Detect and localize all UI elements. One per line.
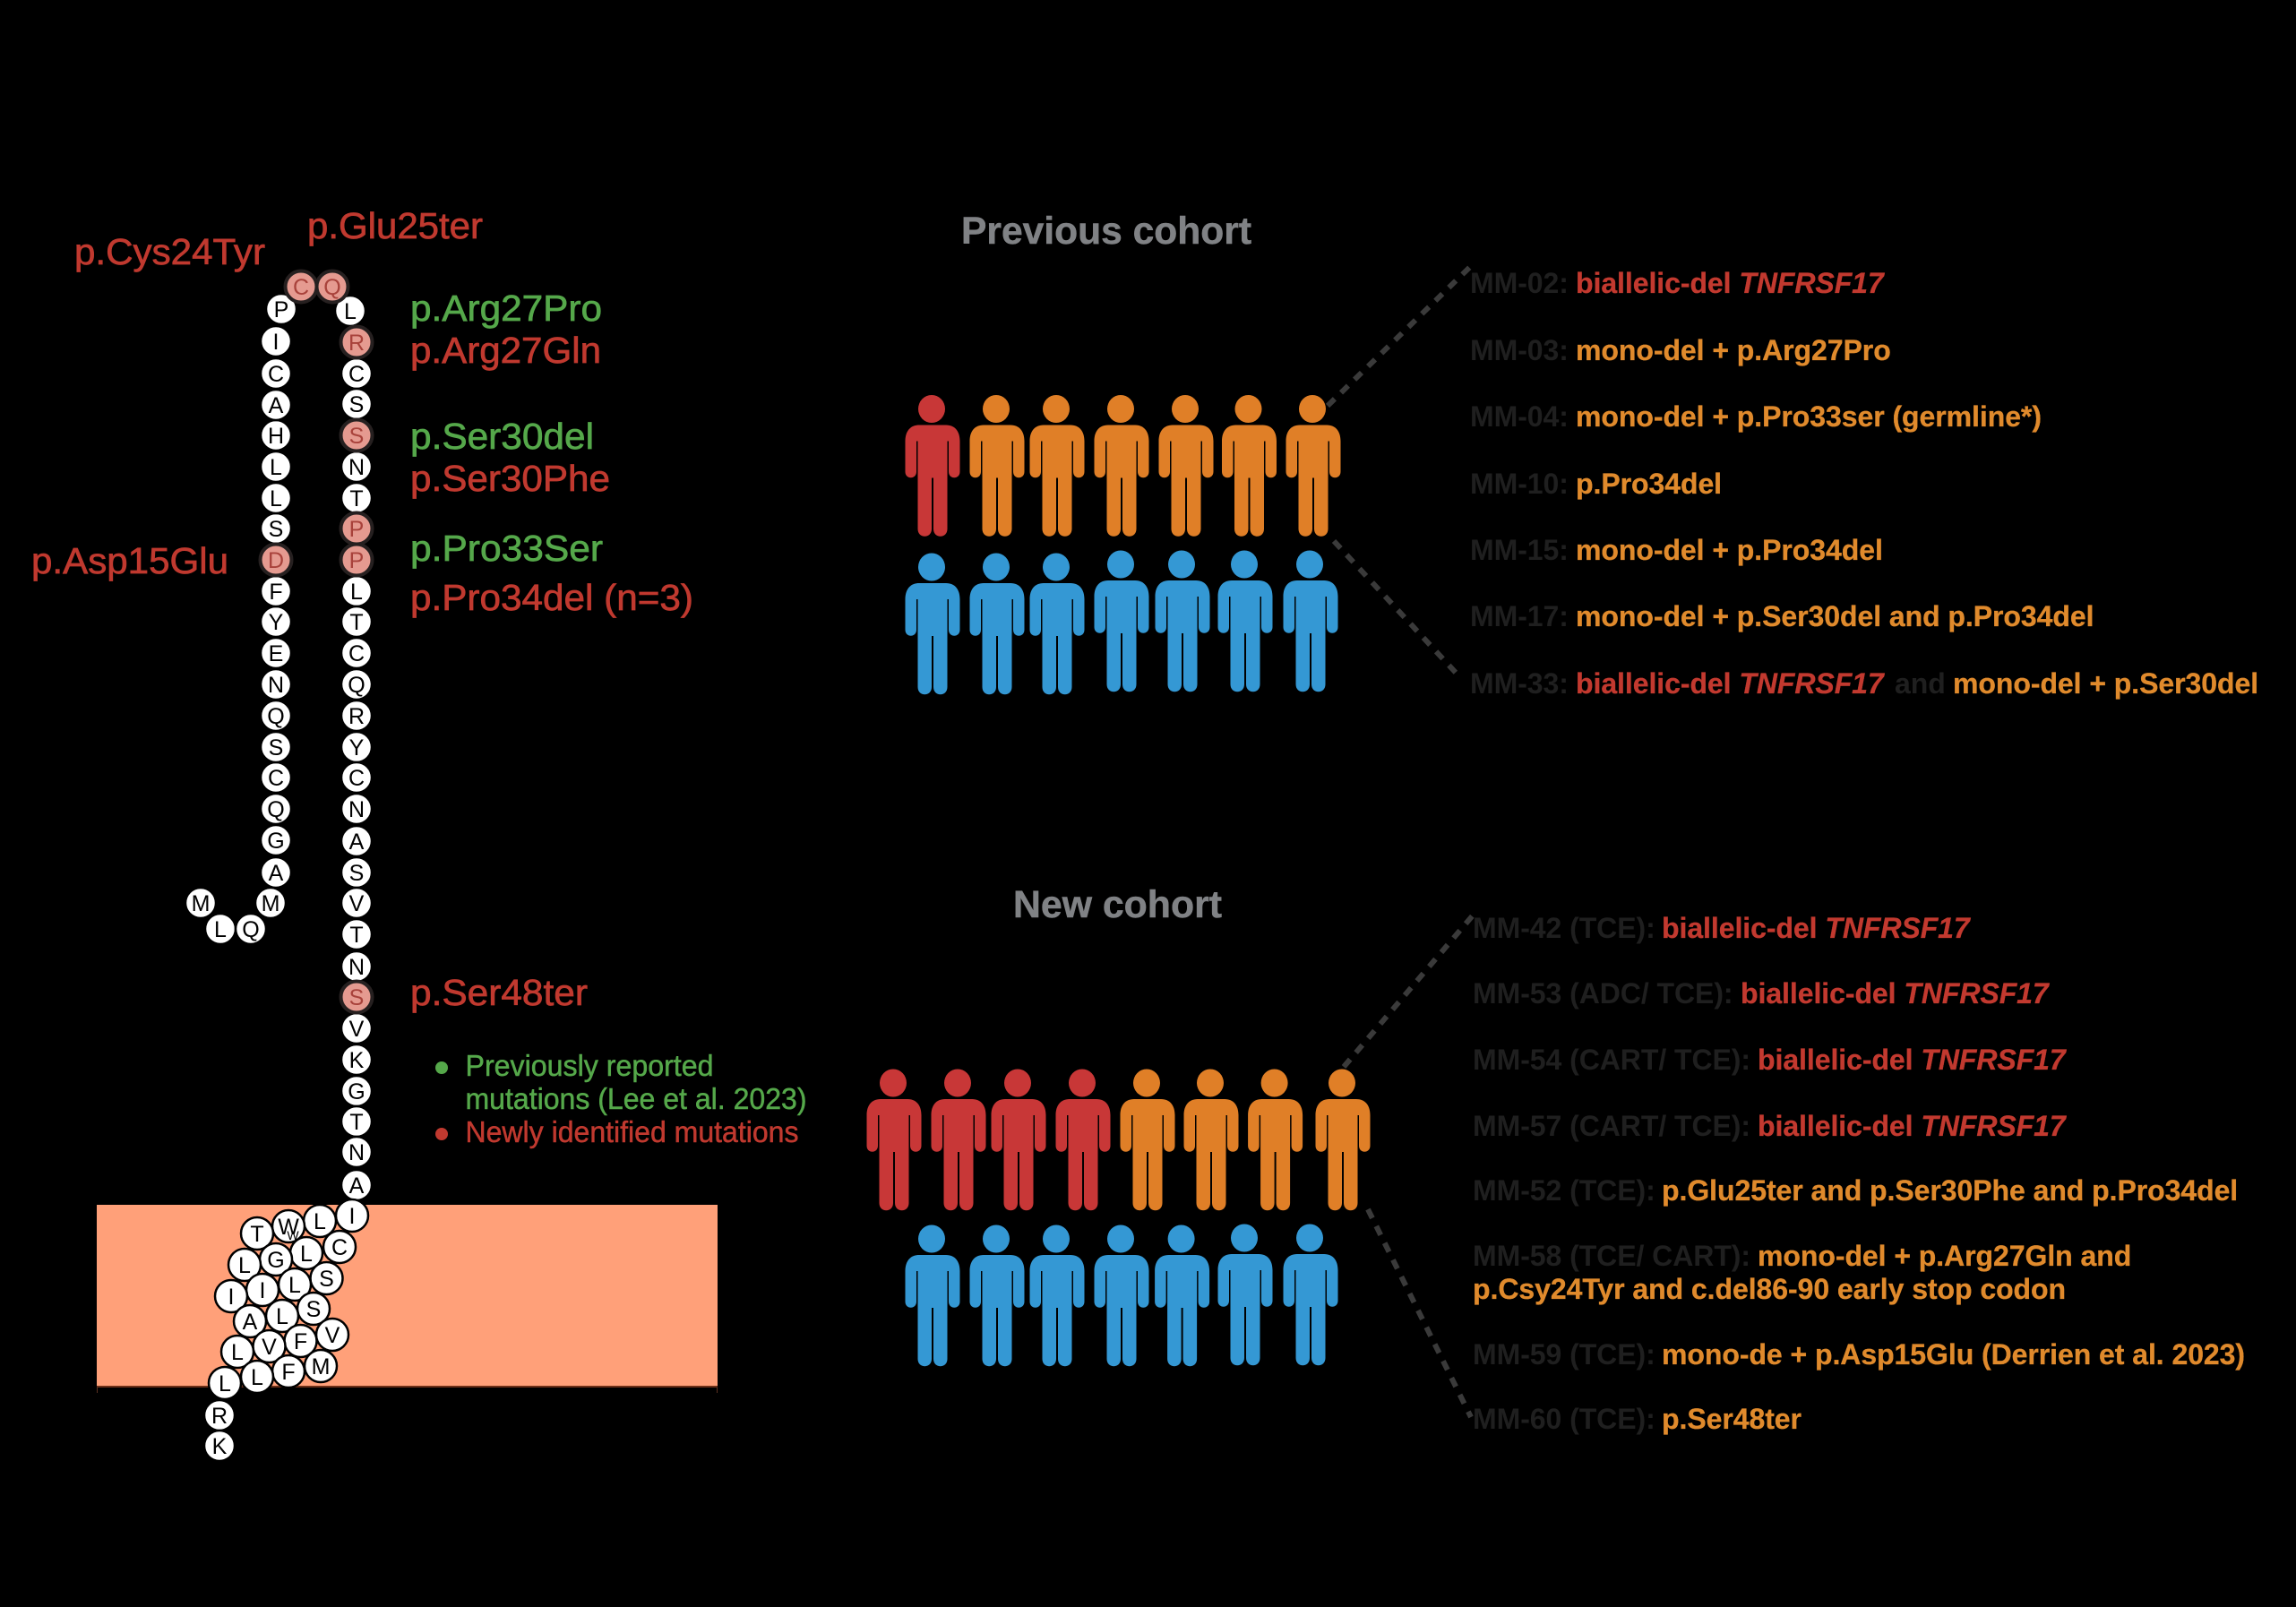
MM-03: mono-del + p.Arg27Pro: [1576, 334, 1891, 366]
protein chain: right strand: A: [349, 1173, 365, 1199]
protein chain: right strand: L: [344, 299, 357, 324]
transmembrane helix residues: F: [294, 1329, 307, 1354]
transmembrane helix residues: L: [251, 1365, 263, 1390]
MM-52: MM-52 (TCE):: [1473, 1174, 1655, 1207]
MM-58: mono-del + p.Arg27Gln and: [1758, 1240, 2131, 1272]
protein chain: N-terminal left strand: H: [268, 424, 284, 449]
protein chain: N-terminal left strand: S: [269, 517, 283, 542]
transmembrane helix residues: L: [288, 1273, 301, 1298]
label p.Arg27Pro: p.Arg27Pro: [410, 288, 602, 329]
transmembrane helix residues: S: [319, 1267, 334, 1292]
protein chain: N-terminal left strand: L: [270, 455, 282, 480]
MM-10: MM-10:: [1470, 468, 1569, 500]
dashed callout: new cohort: [1344, 915, 1473, 1417]
protein chain: N-terminal left strand: S: [269, 735, 283, 761]
transmembrane helix residues: L: [276, 1304, 288, 1329]
transmembrane helix residues: I: [349, 1204, 355, 1229]
MM-59: mono-de + p.Asp15Glu (Derrien et al. 2023): [1662, 1338, 2245, 1371]
mutated residues highlighted: P: [349, 517, 364, 542]
transmembrane helix residues: V: [262, 1335, 277, 1360]
MM-33: and: [1895, 667, 1946, 700]
protein chain: right strand: N: [348, 955, 365, 980]
protein chain: right strand: T: [349, 486, 364, 511]
label p.Glu25ter: p.Glu25ter: [307, 205, 483, 246]
mutated residues highlighted: C: [293, 275, 309, 300]
transmembrane helix residues: L: [314, 1209, 326, 1234]
MM-04: mono-del + p.Pro33ser (germline*): [1576, 400, 2042, 433]
label p.Ser48ter: p.Ser48ter: [410, 972, 588, 1013]
MM-17: mono-del + p.Ser30del and p.Pro34del: [1576, 600, 2094, 632]
transmembrane helix residues: L: [238, 1253, 251, 1278]
protein chain: right strand: L: [350, 580, 363, 605]
MM-33: biallelic-del TNFRSF17: [1576, 667, 1884, 700]
MM-57: MM-57 (CART/ TCE):: [1473, 1110, 1750, 1142]
protein chain: N-terminal left strand: L: [270, 486, 282, 511]
protein chain: right strand: Q: [348, 673, 365, 698]
MM-33: mono-del + p.Ser30del: [1953, 667, 2258, 700]
mutated residues highlighted: Q: [323, 275, 341, 300]
protein chain: N-terminal left strand: [185, 294, 297, 944]
MM-02: MM-02:: [1470, 267, 1569, 299]
MM-53: MM-53 (ADC/ TCE):: [1473, 977, 1733, 1010]
MM-58: p.Csy24Tyr and c.del86-90 early stop codon: [1473, 1273, 2066, 1305]
protein chain: right strand: G: [348, 1079, 365, 1104]
protein chain: N-terminal left strand: P: [274, 297, 288, 322]
MM-58: MM-58 (TCE/ CART):: [1473, 1240, 1750, 1272]
protein chain: N-terminal left strand: C: [268, 766, 284, 791]
MM-59: MM-59 (TCE):: [1473, 1338, 1655, 1371]
protein chain: right strand: S: [349, 861, 364, 886]
transmembrane helix residues: I: [260, 1278, 265, 1303]
protein chain: N-terminal left strand: L: [214, 917, 227, 942]
protein chain: N-terminal left strand: C: [268, 362, 284, 387]
mutated residues highlighted: [260, 271, 373, 1012]
protein chain: N-terminal left strand: Y: [269, 610, 284, 635]
transmembrane helix residues: T: [250, 1222, 264, 1247]
MM-53: biallelic-del TNFRSF17: [1741, 977, 2049, 1010]
people: previous cohort top row: [905, 395, 1340, 537]
label p.Asp15Glu: p.Asp15Glu: [31, 540, 228, 581]
protein chain: right strand: V: [349, 1017, 365, 1042]
people: new cohort top row: [867, 1070, 1371, 1210]
protein chain: right strand: N: [348, 1140, 365, 1165]
people: new cohort bottom row: [905, 1224, 1338, 1366]
transmembrane helix residues: G: [267, 1248, 285, 1273]
label p.Arg27Gln: p.Arg27Gln: [410, 330, 601, 371]
transmembrane helix residues: M: [312, 1354, 330, 1379]
transmembrane helix residues: L: [219, 1371, 231, 1396]
protein chain: N-terminal left strand: E: [269, 641, 283, 666]
protein chain: right strand: N: [348, 455, 365, 480]
label p.Ser30del: p.Ser30del: [410, 416, 594, 457]
protein chain: right strand: C: [348, 766, 365, 791]
protein chain: right strand: N: [348, 797, 365, 822]
transmembrane helix residues: L: [231, 1340, 244, 1365]
membrane band: [97, 1205, 718, 1393]
patient list: previous cohort: [1470, 267, 2258, 700]
protein chain: right strand: A: [349, 829, 365, 855]
protein chain: right strand: [335, 296, 372, 1200]
protein chain: right strand: C: [348, 641, 365, 666]
MM-15: MM-15:: [1470, 534, 1569, 566]
MM-02: biallelic-del TNFRSF17: [1576, 267, 1884, 299]
dashed callout: previous cohort: [1328, 267, 1470, 674]
MM-60: MM-60 (TCE):: [1473, 1403, 1655, 1435]
transmembrane helix residues: A: [243, 1310, 258, 1335]
mutation labels: [31, 205, 693, 1013]
protein chain: right strand: V: [349, 891, 365, 916]
transmembrane helix residues: F: [281, 1360, 296, 1385]
transmembrane helix residues: W: [278, 1215, 299, 1240]
mutated residues highlighted: S: [349, 424, 364, 449]
mutated residues highlighted: S: [349, 985, 364, 1010]
MM-04: MM-04:: [1470, 400, 1569, 433]
label p.Pro33Ser: p.Pro33Ser: [410, 528, 603, 569]
MM-54: biallelic-del TNFRSF17: [1758, 1044, 2066, 1076]
mutated residues highlighted: R: [348, 331, 365, 356]
label p.Cys24Tyr: p.Cys24Tyr: [74, 231, 265, 272]
protein chain: right strand: Y: [349, 735, 365, 761]
transmembrane helix residues: L: [300, 1242, 313, 1267]
transmembrane helix residues: S: [306, 1297, 321, 1322]
transmembrane helix residues: R: [211, 1404, 228, 1429]
legend: [435, 1049, 806, 1148]
protein chain: N-terminal left strand: Q: [242, 917, 260, 942]
protein chain: N-terminal left strand: F: [269, 580, 283, 605]
transmembrane helix residues: C: [331, 1235, 348, 1260]
MM-17: MM-17:: [1470, 600, 1569, 632]
transmembrane helix residues: W: [287, 1228, 299, 1242]
MM-42: MM-42 (TCE):: [1473, 912, 1655, 944]
MM-54: MM-54 (CART/ TCE):: [1473, 1044, 1750, 1076]
transmembrane helix residues: V: [325, 1323, 340, 1348]
mutated residues highlighted: P: [349, 548, 364, 573]
protein chain: right strand: S: [349, 392, 364, 417]
transmembrane helix residues: [204, 1199, 368, 1461]
protein chain: N-terminal left strand: Q: [267, 797, 285, 822]
protein chain: right strand: T: [349, 923, 364, 948]
protein chain: right strand: K: [349, 1048, 365, 1073]
protein chain: N-terminal left strand: A: [269, 861, 284, 886]
legend: Previously reported: [466, 1049, 713, 1082]
MM-42: biallelic-del TNFRSF17: [1662, 912, 1970, 944]
protein chain: right strand: T: [349, 1110, 364, 1135]
MM-52: p.Glu25ter and p.Ser30Phe and p.Pro34del: [1662, 1174, 2238, 1207]
protein chain: N-terminal left strand: Q: [267, 704, 285, 729]
label p.Pro34del: p.Pro34del (n=3): [410, 577, 693, 618]
heading: new cohort: New cohort: [1013, 883, 1222, 926]
transmembrane helix residues: K: [212, 1434, 228, 1459]
protein chain: N-terminal left strand: M: [262, 891, 279, 916]
label p.Ser30Phe: p.Ser30Phe: [410, 458, 610, 499]
heading: previous cohort: Previous cohort: [961, 210, 1251, 253]
legend: Newly identified mutations: [466, 1115, 799, 1148]
patient list: new cohort: [1473, 912, 2245, 1435]
transmembrane helix residues: I: [228, 1285, 234, 1310]
people: previous cohort bottom row: [905, 550, 1338, 694]
protein chain: N-terminal left strand: I: [273, 330, 279, 355]
protein chain: N-terminal left strand: N: [268, 673, 284, 698]
MM-15: mono-del + p.Pro34del: [1576, 534, 1883, 566]
protein chain: N-terminal left strand: G: [267, 829, 285, 854]
MM-33: MM-33:: [1470, 667, 1569, 700]
legend: mutations (Lee et al. 2023): [466, 1082, 806, 1115]
protein chain: N-terminal left strand: A: [269, 393, 284, 418]
MM-57: biallelic-del TNFRSF17: [1758, 1110, 2066, 1142]
MM-60: p.Ser48ter: [1662, 1403, 1802, 1435]
protein chain: right strand: T: [349, 610, 364, 635]
MM-03: MM-03:: [1470, 334, 1569, 366]
protein chain: N-terminal left strand: M: [192, 891, 210, 916]
MM-10: p.Pro34del: [1576, 468, 1722, 500]
protein chain: right strand: C: [348, 362, 365, 387]
mutated residues highlighted: D: [268, 548, 284, 573]
protein chain: right strand: R: [348, 704, 365, 729]
